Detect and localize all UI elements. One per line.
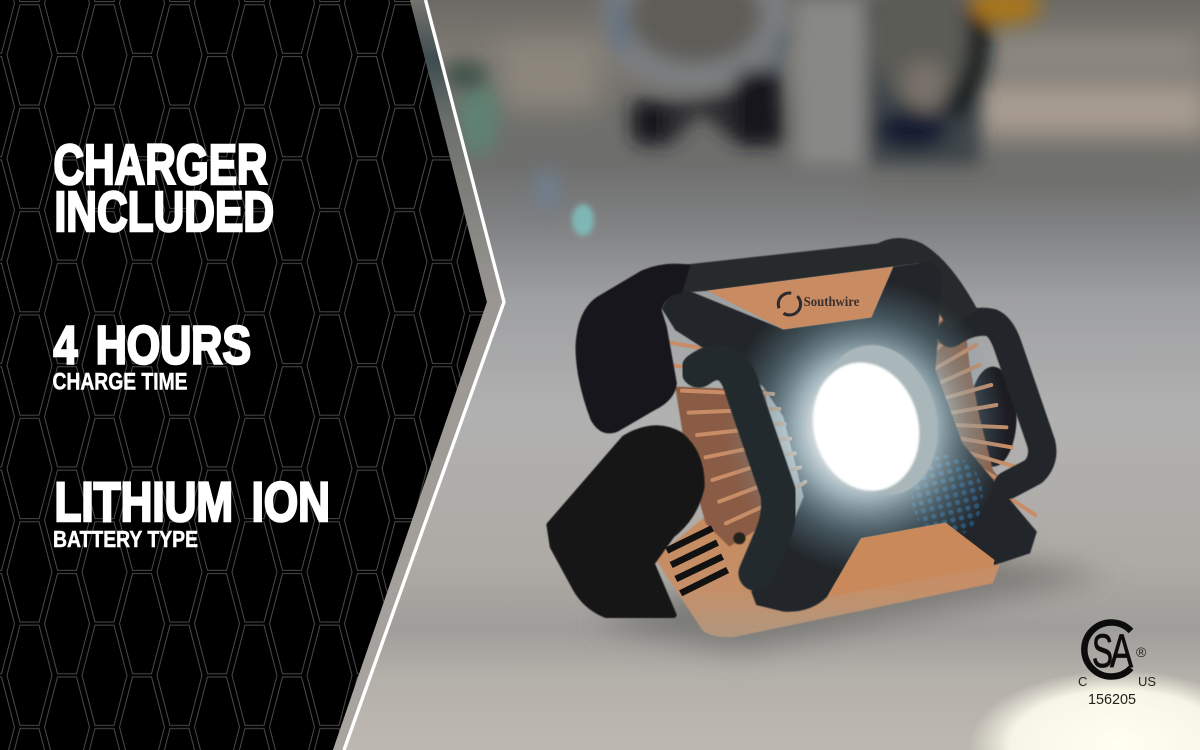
stat: lithium ion battery type (53, 470, 330, 552)
heading: charger included: INCLUDED (54, 180, 274, 244)
stat: 4 hours charge time: CHARGE TIME (52, 368, 188, 396)
x-shaped face (662, 262, 1037, 612)
southwire logo (778, 293, 859, 315)
csa certification mark: A (1110, 624, 1133, 677)
lower left bumper (549, 428, 702, 615)
frosted band beside panel edge (333, 0, 505, 750)
csa certification mark: C (1078, 674, 1087, 689)
csa certification mark: 156205 (1088, 691, 1136, 708)
work light product (549, 238, 1042, 637)
stat: 4 hours charge time (52, 316, 251, 396)
lens (799, 351, 933, 502)
southwire logo: Southwire (804, 294, 859, 309)
csa certification mark: ® (1136, 644, 1147, 660)
stat: lithium ion battery type: BATTERY TYPE (53, 526, 198, 552)
csa certification mark: US (1138, 674, 1156, 689)
fin stubs right of handle (765, 393, 805, 487)
right rubber bump (969, 367, 1017, 467)
device shadow on floor (590, 555, 1110, 650)
heat sink fins left (665, 342, 783, 573)
centre rubber handle (699, 363, 779, 573)
heading: charger included: CHARGER (54, 133, 268, 197)
stat: lithium ion battery type: LITHIUM ION (54, 470, 330, 533)
vent slots (667, 528, 728, 593)
light glow (724, 280, 1008, 573)
upper copper label (707, 267, 893, 329)
upper left bumper (575, 264, 690, 433)
white chevron line (344, 0, 504, 750)
csa certification mark (1078, 623, 1156, 708)
lens ring (806, 333, 953, 507)
copper body (655, 513, 1001, 637)
black hexagon panel (0, 0, 500, 750)
floor light spot (960, 630, 1200, 750)
right rubber handle (951, 322, 1042, 485)
csa certification mark: S (1092, 624, 1113, 677)
top rubber frame (652, 238, 978, 330)
heading: charger included (54, 133, 274, 244)
stat: 4 hours charge time: 4 HOURS (54, 316, 251, 376)
lower copper label (827, 523, 995, 597)
blue reflector dots (912, 455, 983, 538)
heat sink fins right (932, 300, 1035, 515)
